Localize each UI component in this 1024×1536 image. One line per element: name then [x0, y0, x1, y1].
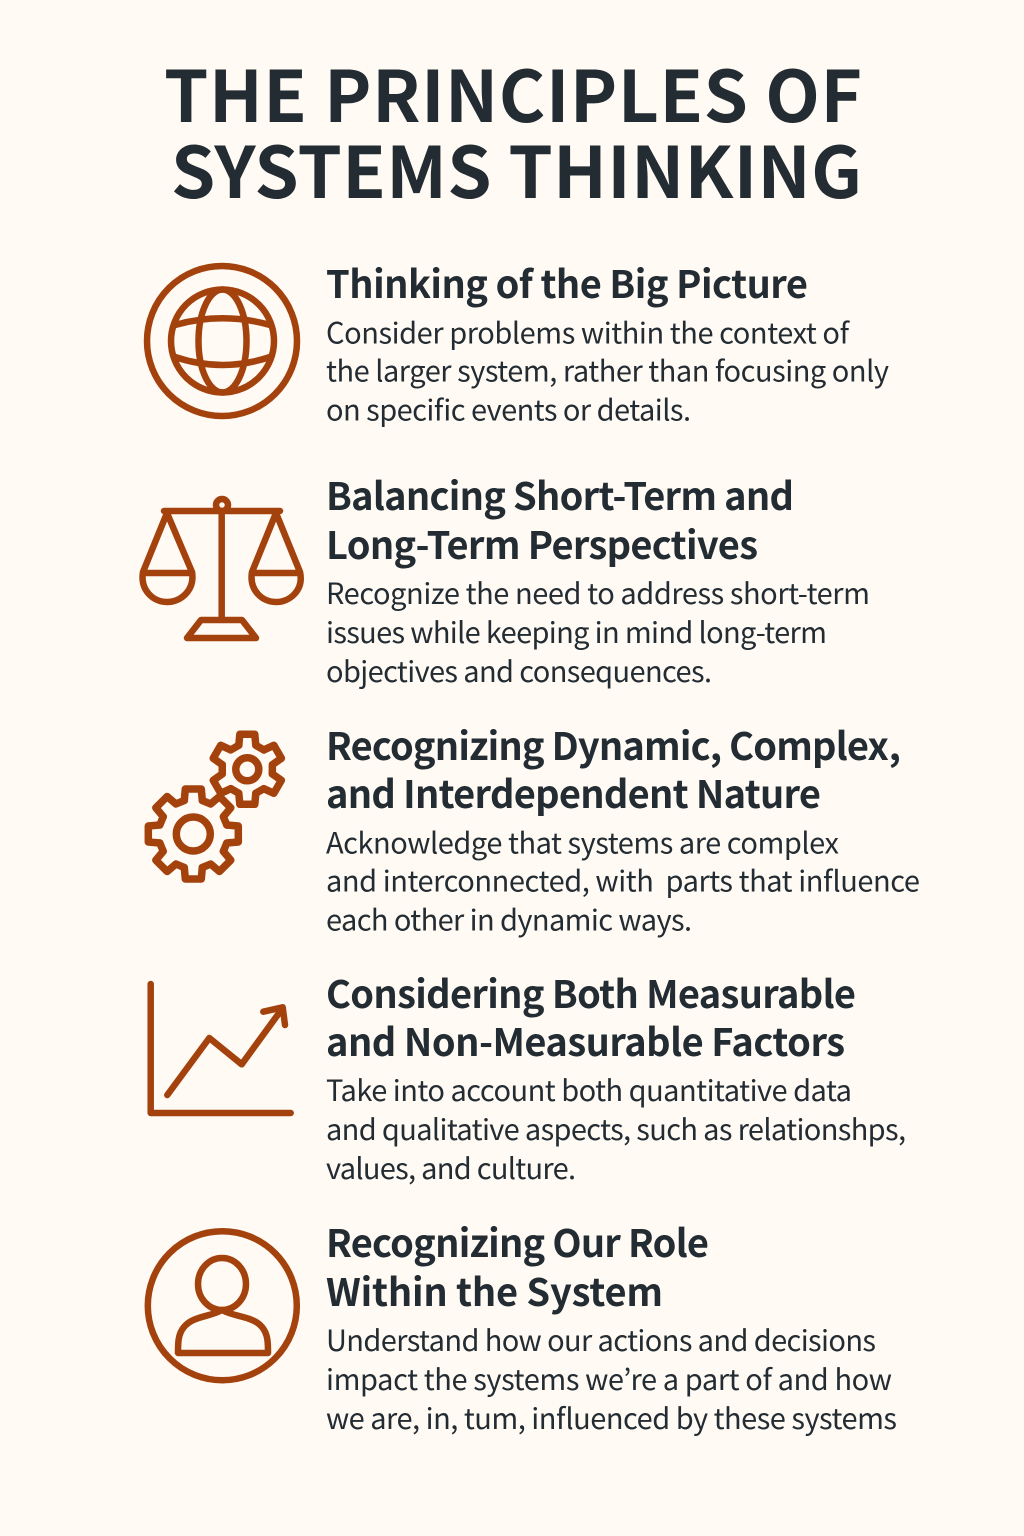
- title: SYSTEMS THINKING: [171, 117, 862, 219]
- description: and qualitative aspects, such as relationshps,: [326, 1107, 906, 1149]
- description: the larger system, rather than focusing only: [326, 348, 889, 390]
- panel: dynamic and complex: [148, 716, 920, 940]
- icon: gears: [148, 734, 286, 879]
- title: THE PRINCIPLES OF: [164, 41, 862, 143]
- description: [326, 571, 870, 691]
- description: [326, 1318, 897, 1438]
- description: values, and culture.: [326, 1146, 576, 1188]
- panel: measurable factors: [151, 964, 906, 1188]
- heading: [326, 716, 901, 819]
- heading: Recognizing Dynamic, Complex,: [326, 716, 901, 771]
- icon: line chart: [151, 984, 291, 1113]
- heading: and Non-Measurable Factors: [326, 1012, 845, 1067]
- heading: [326, 1213, 709, 1317]
- panel: our role: [148, 1213, 897, 1438]
- heading: [326, 964, 856, 1067]
- heading: Recognizing Our Role: [326, 1213, 709, 1268]
- icon: person in circle: [148, 1231, 297, 1380]
- description: Acknowledge that systems are complex: [326, 820, 839, 862]
- description: issues while keeping in mind long-term: [326, 610, 827, 652]
- heading: Thinking of the Big Picture: [326, 254, 808, 309]
- description: Consider problems within the context of: [326, 310, 851, 352]
- description: on specific events or details.: [326, 388, 691, 430]
- description: Take into account both quantitative data: [326, 1068, 852, 1110]
- description: we are, in, tum, influenced by these systems: [326, 1396, 897, 1438]
- description: and interconnected, with parts that influence: [326, 858, 920, 900]
- description: Understand how our actions and decisions: [326, 1318, 876, 1360]
- description: each other in dynamic ways.: [326, 898, 692, 940]
- panel: short and long term: [143, 466, 870, 691]
- description: [326, 1068, 906, 1188]
- heading: Within the System: [326, 1262, 663, 1317]
- heading: and Interdependent Nature: [326, 764, 821, 819]
- title: [164, 41, 862, 219]
- description: impact the systems we’re a part of and how: [326, 1357, 892, 1399]
- heading: [326, 466, 794, 570]
- description: [326, 820, 920, 940]
- description: objectives and consequences.: [326, 649, 712, 691]
- heading: Long-Term Perspectives: [326, 515, 758, 570]
- icon: balance scales: [143, 499, 301, 638]
- description: Recognize the need to address short-term: [326, 571, 870, 613]
- panel: big picture: [147, 254, 889, 430]
- icon: globe: [147, 266, 297, 416]
- heading: Considering Both Measurable: [326, 964, 856, 1019]
- heading: Balancing Short-Term and: [326, 466, 794, 521]
- description: [326, 310, 889, 430]
